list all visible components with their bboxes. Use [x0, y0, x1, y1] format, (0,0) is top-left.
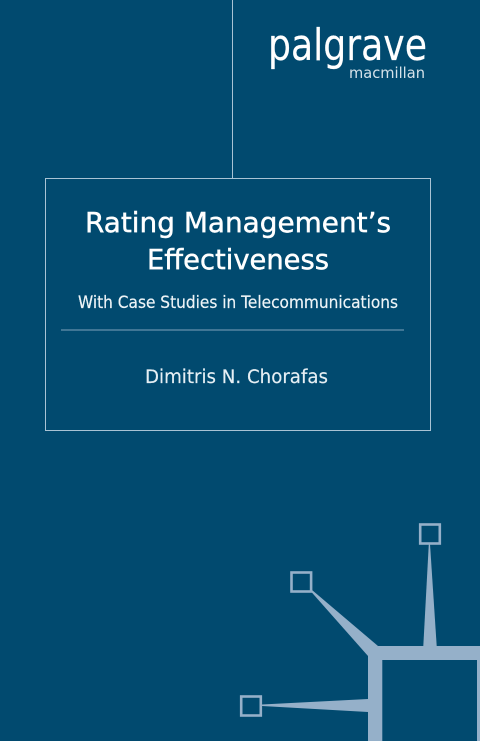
large frame	[368, 646, 480, 741]
publisher logo: macmillan	[349, 64, 425, 82]
title: Effectiveness	[147, 243, 329, 276]
spike: middle	[310, 590, 378, 656]
node: left	[241, 696, 261, 716]
node: middle	[292, 572, 311, 592]
title panel	[46, 178, 430, 430]
publisher logo: palgrave	[268, 20, 427, 71]
spike: left	[262, 699, 368, 712]
title	[85, 206, 391, 276]
publisher logo	[268, 20, 427, 82]
network graphic	[241, 524, 480, 741]
title: Rating Management’s	[85, 206, 391, 239]
node: top	[420, 524, 440, 544]
spike: top	[423, 544, 437, 646]
author: Dimitris N. Chorafas	[145, 367, 328, 388]
subtitle: With Case Studies in Telecommunications	[78, 293, 398, 313]
